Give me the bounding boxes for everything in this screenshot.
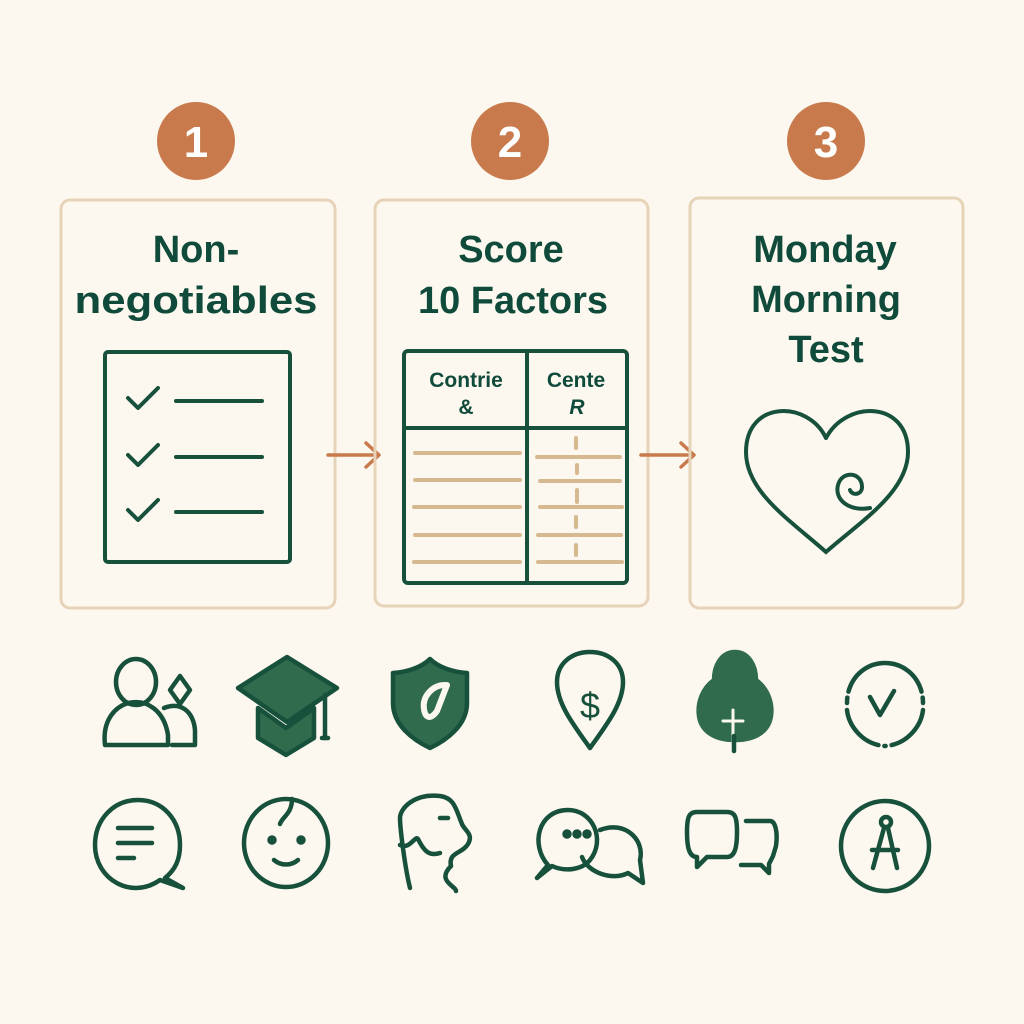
table: Cente xyxy=(547,369,605,392)
heading: Monday Morning Test: Monday xyxy=(753,229,897,271)
heading: Monday Morning Test: Morning xyxy=(751,279,901,321)
panel: score 10 factors xyxy=(375,200,648,606)
icon: circle A xyxy=(841,801,929,891)
icon: graduation cap xyxy=(238,657,337,755)
icon: head profile xyxy=(400,796,470,891)
arrow 2 xyxy=(641,443,694,467)
table: & xyxy=(458,396,474,419)
step badge 3 xyxy=(787,102,865,180)
step badge 3: 3 xyxy=(814,118,838,167)
step badge 1 xyxy=(157,102,235,180)
heading: Monday Morning Test xyxy=(751,229,901,371)
icon: dollar pin xyxy=(557,652,623,748)
icon: speech bubble xyxy=(95,800,183,888)
icon: heart xyxy=(746,411,908,552)
table xyxy=(404,351,627,583)
panel: non-negotiables xyxy=(61,200,335,608)
heading: Non-negotiables: negotiables xyxy=(74,280,318,322)
icon: baby face xyxy=(244,799,328,887)
icon: dollar pin: $ xyxy=(580,685,600,726)
heading: Score 10 Factors: Score xyxy=(458,229,564,271)
step badge 2: 2 xyxy=(498,118,522,167)
step badge 1: 1 xyxy=(184,118,208,167)
icon: check clock xyxy=(847,663,923,746)
icon: chat with dots xyxy=(537,810,643,883)
heading: Score 10 Factors xyxy=(418,229,608,322)
heading: Score 10 Factors: 10 Factors xyxy=(418,280,608,322)
icon: tree xyxy=(699,652,771,751)
heading: Non-negotiables: Non- xyxy=(153,229,239,271)
arrow 1 xyxy=(328,443,379,467)
table: R xyxy=(569,396,585,419)
icon: checklist xyxy=(105,352,290,562)
step badge 2 xyxy=(471,102,549,180)
heading: Monday Morning Test: Test xyxy=(788,329,864,371)
icon: people xyxy=(105,659,195,745)
icon row 1 xyxy=(105,652,923,755)
panel: monday morning test xyxy=(690,198,963,608)
heading: Non-negotiables xyxy=(74,229,318,322)
icon: two speech bubbles xyxy=(687,812,777,873)
icon: shield xyxy=(393,659,467,748)
icon row 2 xyxy=(95,796,929,891)
table: Contrie xyxy=(429,369,503,392)
